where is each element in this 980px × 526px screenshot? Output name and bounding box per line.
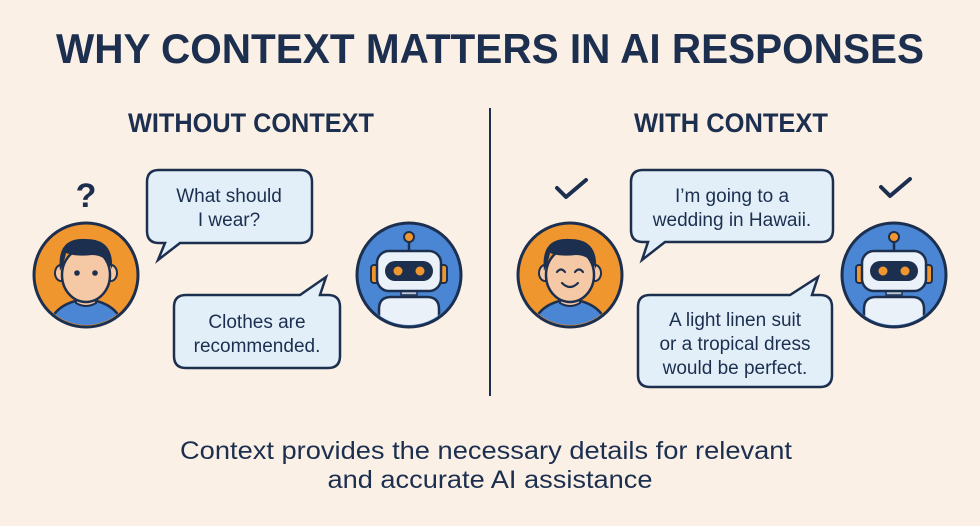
bubble: linen suit answer: A light linen suit: [669, 310, 802, 331]
heading: without context: WITHOUT CONTEXT: [128, 108, 374, 138]
footer text: and accurate AI assistance: [328, 466, 652, 494]
panel: without context: [34, 170, 461, 368]
bubble: linen suit answer: [638, 277, 832, 387]
footer text: Context provides the necessary details for relevant: [180, 437, 792, 465]
bubble: linen suit answer: or a tropical dress: [659, 334, 811, 355]
bubble: clothes are recommended: recommended.: [194, 336, 320, 357]
panel: with context: [518, 170, 946, 387]
bubble: linen suit answer: would be perfect.: [662, 358, 807, 379]
icon: check over robot: [881, 179, 910, 196]
icon: check over person: [557, 180, 586, 197]
bubble: wedding in hawaii: wedding in Hawaii.: [652, 210, 811, 231]
bubble: what should I wear: What should: [176, 186, 282, 207]
title: WHY CONTEXT MATTERS IN AI RESPONSES: [56, 25, 924, 72]
bubble: wedding in hawaii: I’m going to a: [675, 186, 789, 207]
icon: confused person: [34, 223, 138, 330]
icon: question mark: ?: [76, 177, 96, 215]
bubble: wedding in hawaii: [631, 170, 833, 260]
icon: robot: [357, 223, 461, 335]
bubble: what should I wear: I wear?: [198, 210, 260, 231]
bubble: clothes are recommended: [174, 277, 340, 368]
icon: robot: [842, 223, 946, 335]
bubble: what should I wear: [147, 170, 312, 260]
icon: happy person: [518, 223, 622, 330]
bubble: clothes are recommended: Clothes are: [208, 312, 306, 333]
heading: with context: WITH CONTEXT: [634, 108, 828, 138]
footer text: [180, 437, 792, 494]
